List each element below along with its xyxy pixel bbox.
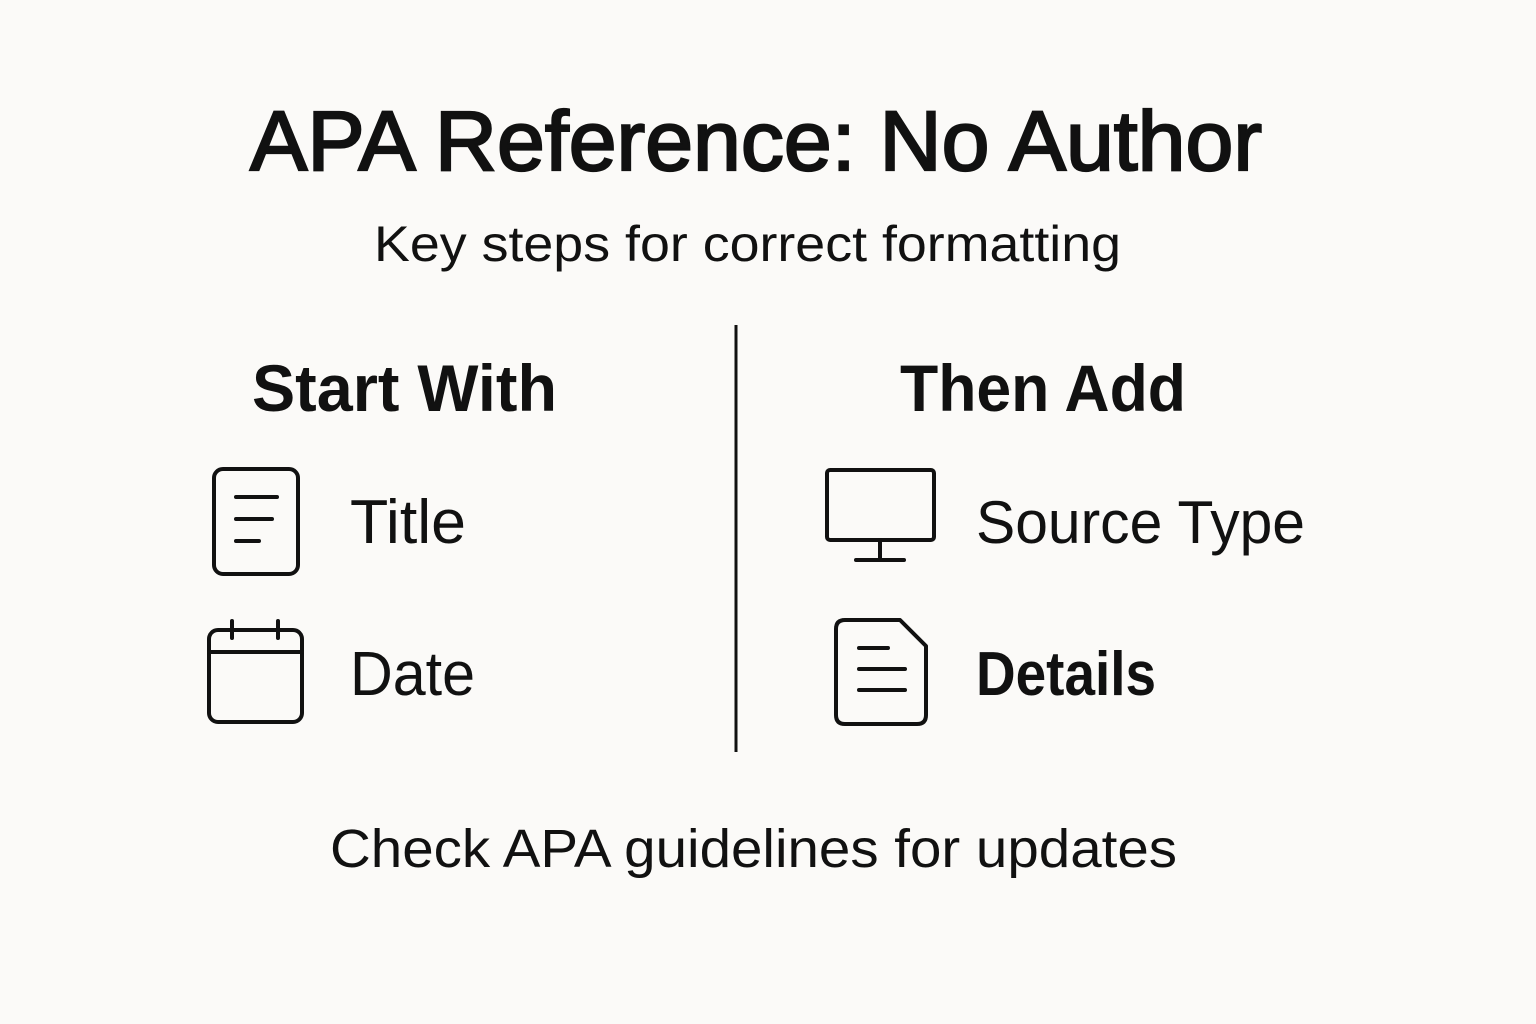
heading: start with: Start With (252, 351, 557, 425)
label: details: Details (976, 640, 1156, 709)
label: title: Title (350, 488, 466, 557)
icon: document (214, 469, 298, 574)
label: source type: Source Type (976, 489, 1305, 556)
heading: then add: Then Add (900, 351, 1186, 425)
label: date: Date (350, 640, 475, 709)
divider (734, 325, 738, 752)
subtitle: Key steps for correct formatting (374, 216, 1121, 272)
panel: then add (827, 351, 1305, 724)
icon: calendar (209, 621, 302, 722)
footer note: Check APA guidelines for updates (330, 819, 1177, 879)
icon: details document (836, 620, 926, 724)
title: APA Reference: No Author (250, 94, 1262, 188)
panel: start with (209, 351, 557, 722)
icon: monitor (827, 470, 934, 560)
